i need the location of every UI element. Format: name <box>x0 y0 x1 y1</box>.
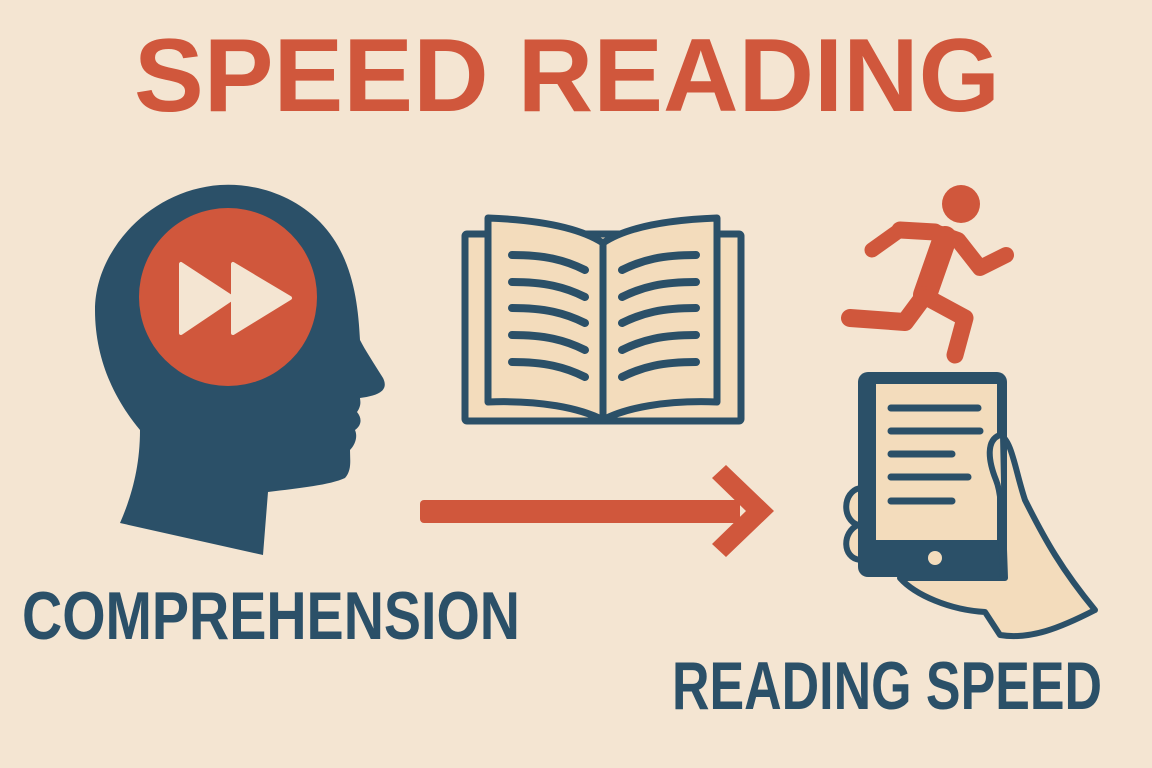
icon: tablet in hand <box>846 372 1095 636</box>
label: comprehension: COMPREHENSION <box>22 578 520 654</box>
hand <box>900 435 1095 636</box>
title: SPEED READING <box>134 18 1000 134</box>
icon: running figure <box>850 185 1006 355</box>
icon: head with fast-forward <box>95 185 385 555</box>
icon: open book <box>465 218 741 421</box>
arrow <box>420 465 774 557</box>
